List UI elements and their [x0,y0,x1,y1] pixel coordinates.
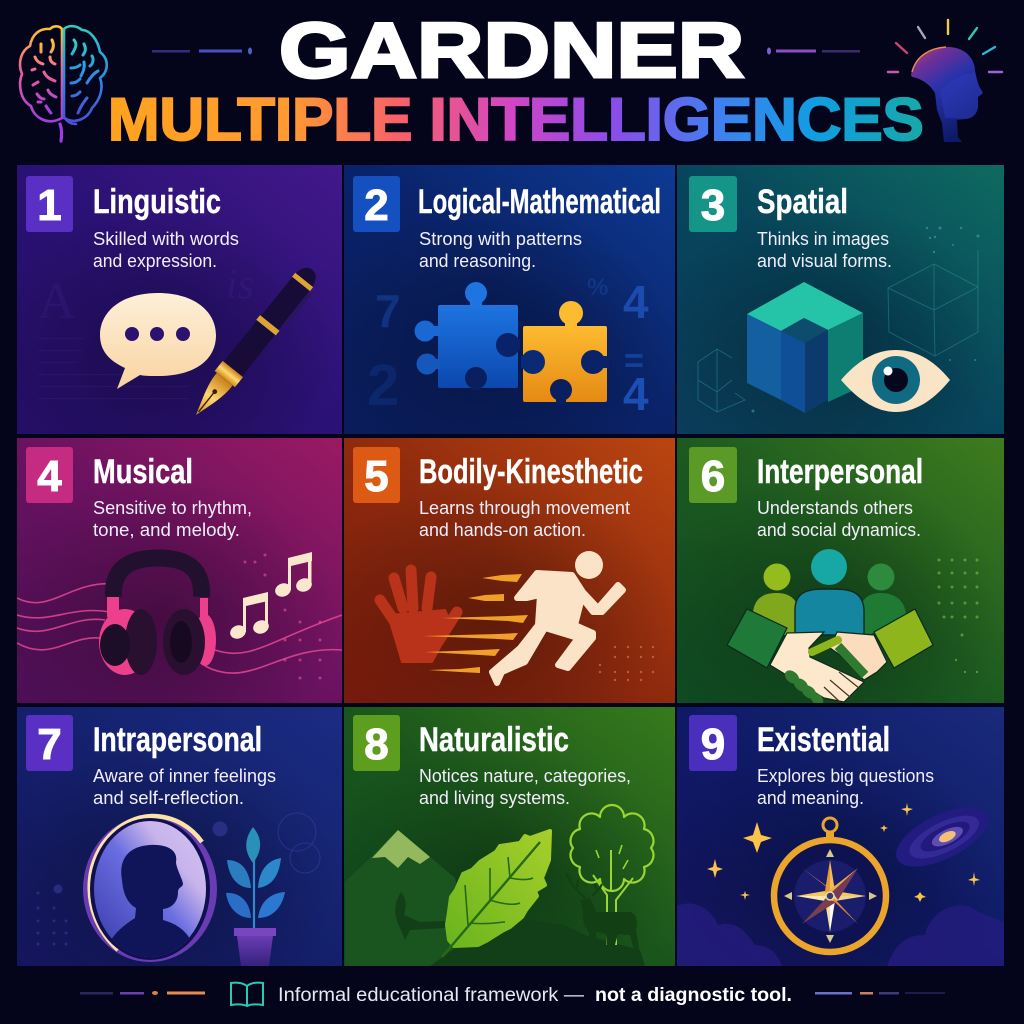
icon: speed lines [423,574,528,673]
icon: blue puzzle piece [414,282,520,390]
description: and expression. [93,251,217,271]
icon: yellow puzzle piece [521,301,609,404]
icon: eye [841,350,950,412]
dots [938,558,978,673]
dots [599,646,654,681]
badge 3: 3 [701,181,725,230]
description: and self-reflection. [93,788,244,808]
description: and reasoning. [419,251,536,271]
icon: fountain pen [196,268,316,415]
heading: Bodily-Kinesthetic [419,453,643,491]
icon: galaxy [887,795,997,879]
description: Skilled with words [93,229,239,249]
icon: clouds [677,903,1004,966]
heading: Naturalistic [419,721,569,759]
footer note: not a diagnostic tool. [595,985,792,1006]
description: Learns through movement [419,498,630,518]
icon: music notes [228,552,314,641]
heading: Spatial [757,183,848,221]
icon: running figure [492,551,623,683]
description [757,766,934,808]
dots [752,226,980,412]
panel: 4 Musical [17,438,342,703]
description [757,498,921,540]
badge 1 [26,176,73,232]
background glyphs [38,262,254,399]
panel: 6 Interpersonal [677,438,1004,707]
description [93,766,276,808]
icon: sparkles [707,803,980,902]
background glyphs: is [226,262,254,308]
description: Aware of inner feelings [93,766,276,786]
description: and meaning. [757,788,864,808]
footer note [278,985,792,1006]
dots and bubbles [36,813,320,946]
badge 6 [689,447,737,503]
description: and visual forms. [757,251,892,271]
icon: compass [774,818,886,952]
panel: 9 Existential [677,707,1004,966]
description: and social dynamics. [757,520,921,540]
icon: tree outline [571,805,653,945]
heading: Musical [93,453,193,491]
icon: large leaf [442,831,550,957]
badge 9: 9 [701,720,725,769]
description: Thinks in images [757,229,889,249]
footer decorative line: right [815,992,945,994]
icon: speech bubble [100,293,216,389]
description: tone, and melody. [93,520,240,540]
description: Strong with patterns [419,229,582,249]
description [757,232,890,267]
background numbers: = [624,342,644,380]
background glyphs: A [38,273,76,330]
badge 7 [26,715,73,771]
badge 9 [689,715,737,771]
icon: open book [231,983,263,1006]
icon: 3D cube [747,282,863,413]
icon: group of people [753,549,906,640]
description [93,498,252,540]
badge 8 [353,715,400,771]
heading: Linguistic [93,183,221,221]
decorative line: title left [152,48,252,54]
heading: Intrapersonal [93,721,262,759]
badge 4: 4 [37,452,62,501]
description [93,229,239,271]
background numbers: 2 [367,353,399,418]
wireframe cubes [698,250,978,412]
background numbers: 4 [623,368,649,420]
background numbers: % [587,274,608,301]
title: GARDNER: GARDNER [279,8,744,94]
heading: Existential [757,721,890,759]
badge 1: 1 [37,181,62,230]
icon: mirror with silhouette [83,816,217,962]
footer note: Informal educational framework — [278,985,584,1006]
icon: deer silhouette [566,873,640,955]
panel: 5 Bodily-Kinesthetic [344,438,675,703]
badge 4 [26,447,73,503]
description: Notices nature, categories, [419,766,631,786]
description [419,766,631,808]
heading: Logical-Mathematical [418,183,661,221]
badge 5 [353,447,400,503]
description: Sensitive to rhythm, [93,498,252,518]
icon: hand [380,570,457,662]
badge 2: 2 [364,181,389,230]
title: MULTIPLE INTELLIGENCES: MULTIPLE INTELLIGENCES [108,86,924,153]
description: Explores big questions [757,766,934,786]
icon: neon brain [20,26,107,141]
icon: potted plant [226,827,285,966]
badge 5: 5 [364,452,389,501]
icon: glowing head [888,20,1002,142]
icon: headphones [99,558,216,675]
decorative line: title right [767,48,860,54]
badge 2 [353,176,400,232]
badge 8: 8 [364,720,389,769]
sound waves [17,584,342,673]
panel: 7 Intrapersonal [17,707,342,966]
description [419,229,582,271]
icon: handshake [727,609,933,707]
panel: 2 Logical-Mathematical [344,165,675,434]
panel: 8 Naturalistic [344,707,675,966]
description: and living systems. [419,788,570,808]
badge 3 [689,176,737,232]
background numbers: 7 [375,285,401,337]
description: Understands others [757,498,913,518]
dots [244,554,322,680]
panel: 1 Linguistic [17,165,342,434]
badge 7: 7 [37,720,62,769]
background numbers: 4 [623,276,649,328]
panel: 3 Spatial [677,165,1004,434]
badge 6: 6 [701,452,725,501]
heading: Interpersonal [757,453,923,491]
description [420,500,630,536]
background numbers [369,278,648,410]
description: and hands-on action. [419,520,586,540]
icon: mountain and landscape [345,830,645,966]
footer decorative line: left [80,991,205,995]
